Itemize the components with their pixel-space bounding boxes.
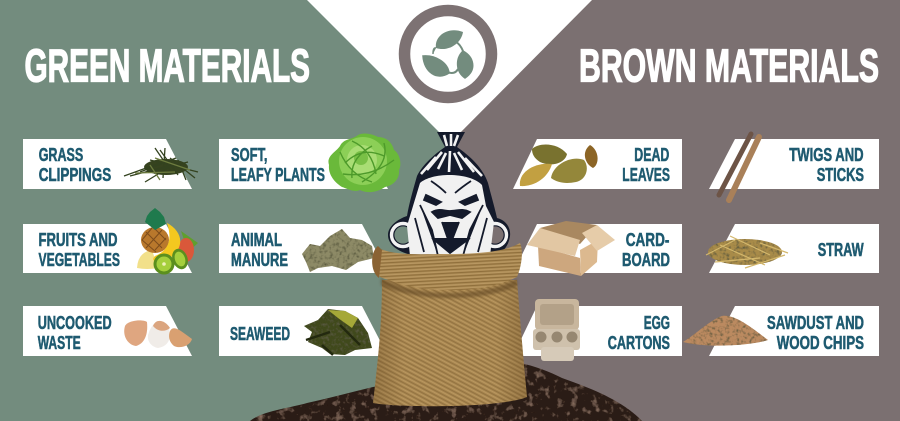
icon: sawdust pile — [683, 316, 768, 346]
sack knot edge — [372, 246, 382, 278]
label: grass clippings: CLIPPINGS — [39, 165, 111, 185]
label: sawdust and wood chips: WOOD CHIPS — [777, 333, 864, 353]
card: sawdust and wood chips — [683, 306, 879, 356]
icon: lettuce — [328, 134, 400, 192]
label: twigs and sticks — [789, 145, 864, 185]
icon: manure pile — [302, 229, 374, 272]
white centre triangle — [307, 0, 592, 143]
card: egg cartons — [513, 299, 682, 361]
label: soft leafy plants — [231, 145, 325, 185]
icon: dead leaves — [520, 145, 598, 186]
icon: grass — [124, 148, 198, 182]
sack collar shadow — [381, 278, 517, 298]
sack collar — [376, 243, 522, 290]
sack body shading — [373, 280, 527, 406]
label: uncooked waste — [38, 313, 112, 353]
label: twigs and sticks: STICKS — [817, 165, 864, 185]
icon: cardboard box — [527, 221, 615, 276]
card: twigs and sticks — [709, 134, 879, 200]
label: fruits and vegetables: FRUITS AND — [38, 230, 118, 250]
card: fruits and vegetables — [23, 208, 198, 274]
card: dead leaves — [513, 139, 682, 189]
card: grass clippings — [23, 139, 198, 189]
heading: green materials: GREEN MATERIALS — [24, 40, 310, 92]
mask facial features — [415, 181, 487, 256]
label: sawdust and wood chips — [767, 313, 864, 353]
label: sawdust and wood chips: SAWDUST AND — [767, 313, 864, 333]
label: soft leafy plants: SOFT, — [231, 145, 268, 165]
label: egg cartons: CARTONS — [608, 333, 670, 353]
icon: fruit pile — [137, 208, 198, 274]
label: fruits and vegetables — [38, 230, 120, 270]
label: cardboard: BOARD — [622, 250, 670, 270]
card: animal manure — [219, 224, 388, 273]
mask face — [407, 175, 494, 256]
icon: straw pile — [706, 236, 788, 268]
card: uncooked waste — [23, 306, 192, 356]
label: cardboard: CARD- — [626, 230, 669, 250]
label: egg cartons — [608, 313, 670, 353]
mask figure — [388, 132, 510, 256]
label: grass clippings — [39, 145, 111, 185]
label: soft leafy plants: LEAFY PLANTS — [231, 165, 325, 185]
card: straw — [706, 224, 879, 273]
card: cardboard — [513, 221, 682, 276]
icon: twigs — [719, 134, 759, 200]
mask silhouette — [388, 132, 510, 256]
label: uncooked waste: WASTE — [38, 333, 81, 353]
panel: brown background — [450, 0, 900, 421]
card: soft leafy plants — [219, 134, 400, 192]
burlap sack — [372, 243, 527, 406]
label: twigs and sticks: TWIGS AND — [789, 145, 864, 165]
mask ear rings — [392, 224, 506, 246]
label: grass clippings: GRASS — [39, 145, 83, 165]
card: seaweed — [219, 306, 388, 356]
sack body — [373, 280, 527, 406]
label: animal manure: ANIMAL — [231, 230, 282, 250]
label: fruits and vegetables: VEGETABLES — [38, 250, 120, 270]
label: animal manure: MANURE — [231, 250, 288, 270]
label: straw: STRAW — [818, 240, 864, 260]
label: animal manure — [231, 230, 288, 270]
label: dead leaves — [622, 145, 670, 185]
label: cardboard — [622, 230, 670, 270]
icon: recycling leaves badge — [404, 10, 492, 98]
label: egg cartons: EGG — [644, 313, 670, 333]
label: dead leaves: LEAVES — [622, 165, 670, 185]
soil mound — [250, 363, 642, 421]
icon: egg carton — [533, 299, 580, 361]
icon: egg shells — [124, 320, 192, 348]
label: seaweed: SEAWEED — [230, 324, 290, 344]
icon: seaweed — [304, 309, 372, 355]
mask hair lines — [421, 134, 482, 176]
label: uncooked waste: UNCOOKED — [38, 313, 112, 333]
panel: green background — [0, 0, 450, 421]
label: dead leaves: DEAD — [634, 145, 669, 165]
